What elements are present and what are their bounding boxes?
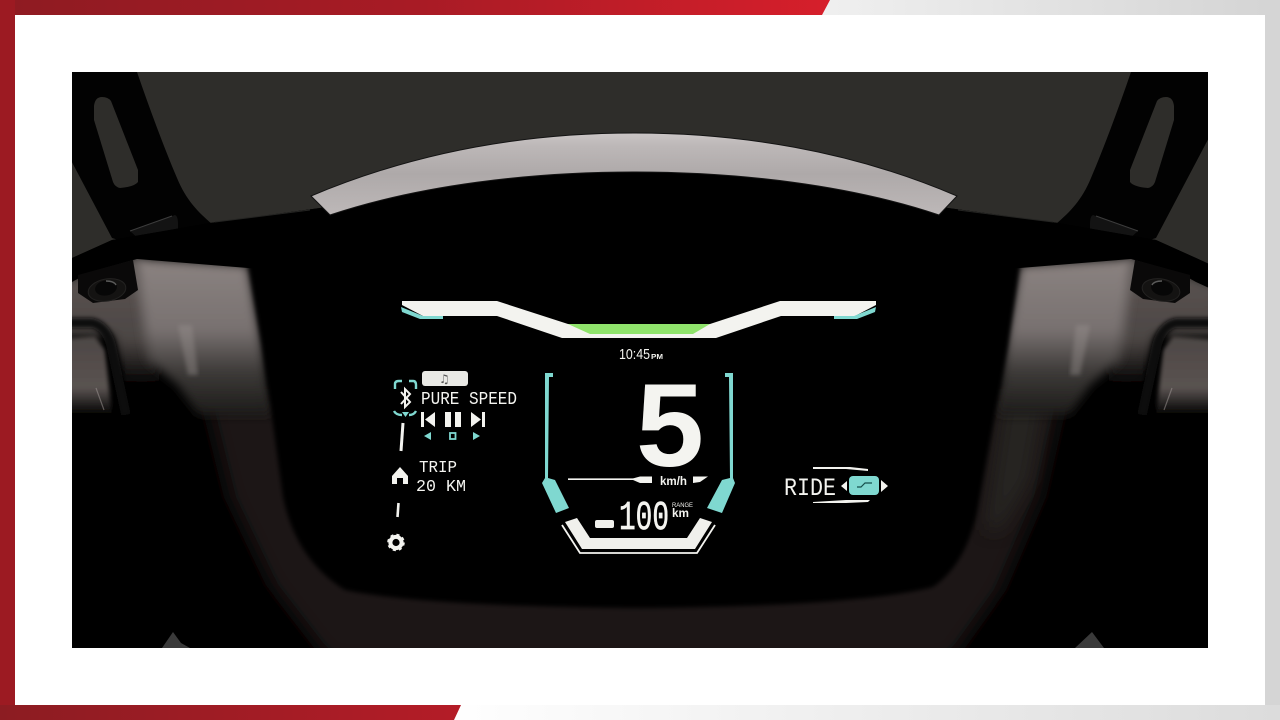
photo background wall — [72, 72, 1208, 264]
right body panel — [996, 255, 1218, 415]
left top band and bolt — [50, 208, 320, 304]
green segment — [568, 324, 710, 334]
right teal accent — [834, 307, 876, 319]
bottom-left corner wedge — [162, 632, 190, 648]
right speed rule — [693, 476, 708, 483]
battery cup — [562, 518, 715, 553]
speed value: 5 — [636, 360, 704, 492]
icon: home — [392, 467, 408, 484]
icon: bluetooth — [401, 389, 410, 407]
range value: 100 — [619, 496, 669, 542]
left teal gauge arm — [542, 373, 569, 513]
frame: red bottom border — [0, 705, 461, 720]
trip readout: TRIP — [419, 459, 457, 478]
music widget — [421, 371, 517, 440]
teal mode button — [849, 476, 879, 495]
bottom-right corner wedge — [1075, 632, 1104, 648]
photo panel: scooter dashboard — [50, 72, 1218, 660]
frame: red top border — [0, 0, 830, 15]
right surround highlight — [990, 416, 1038, 522]
right top band and bolt — [948, 208, 1218, 304]
icon: settings gear — [388, 535, 404, 550]
battery dash — [595, 520, 614, 528]
icon: selection pointer — [402, 412, 409, 417]
frame: red left border — [0, 0, 15, 720]
display: top charge bar — [401, 301, 876, 338]
right mounting bracket — [1058, 72, 1208, 239]
dim surround strip around display — [205, 395, 1063, 660]
next control — [471, 412, 485, 427]
right teal arrow — [473, 432, 480, 440]
left teal accent — [401, 307, 443, 319]
bluetooth selection brackets — [394, 381, 416, 415]
left speed rule — [568, 476, 652, 483]
trip readout — [416, 459, 466, 497]
connector line 1 — [401, 423, 403, 451]
ride mode selector — [784, 467, 888, 503]
upper rule — [813, 467, 868, 471]
left mounting bracket — [72, 72, 210, 239]
music tab — [422, 371, 468, 386]
teal stop square — [450, 433, 456, 439]
range unit: km — [672, 508, 689, 520]
previous control — [421, 412, 435, 427]
dark lower body — [50, 165, 1218, 660]
frame: grey top and right border — [800, 0, 1280, 720]
clock: PM — [651, 352, 663, 361]
left teal arrow — [424, 432, 431, 440]
trip readout: 20 KM — [416, 478, 466, 497]
left body panel — [72, 259, 270, 418]
lower rule — [813, 500, 870, 503]
display recess — [248, 262, 1020, 608]
speed gauge — [542, 360, 735, 513]
frame: grey bottom border — [440, 705, 1280, 720]
range readout — [595, 496, 694, 542]
track title: PURE SPEED — [421, 390, 517, 410]
speed unit: km/h — [660, 474, 687, 488]
side navigation icons — [388, 381, 416, 550]
right arrow — [881, 480, 888, 492]
music note icon: ♫ — [439, 372, 450, 386]
connector line 2 — [398, 503, 399, 517]
left arrow — [841, 481, 847, 491]
mode glyph — [857, 483, 872, 487]
silver cowl arc — [311, 133, 957, 215]
ride label: RIDE — [784, 474, 836, 503]
range label: RANGE — [672, 502, 694, 509]
white bar — [402, 301, 876, 338]
right teal gauge arm — [707, 373, 735, 513]
pause control — [445, 412, 461, 427]
clock: 10:45 — [619, 346, 650, 363]
